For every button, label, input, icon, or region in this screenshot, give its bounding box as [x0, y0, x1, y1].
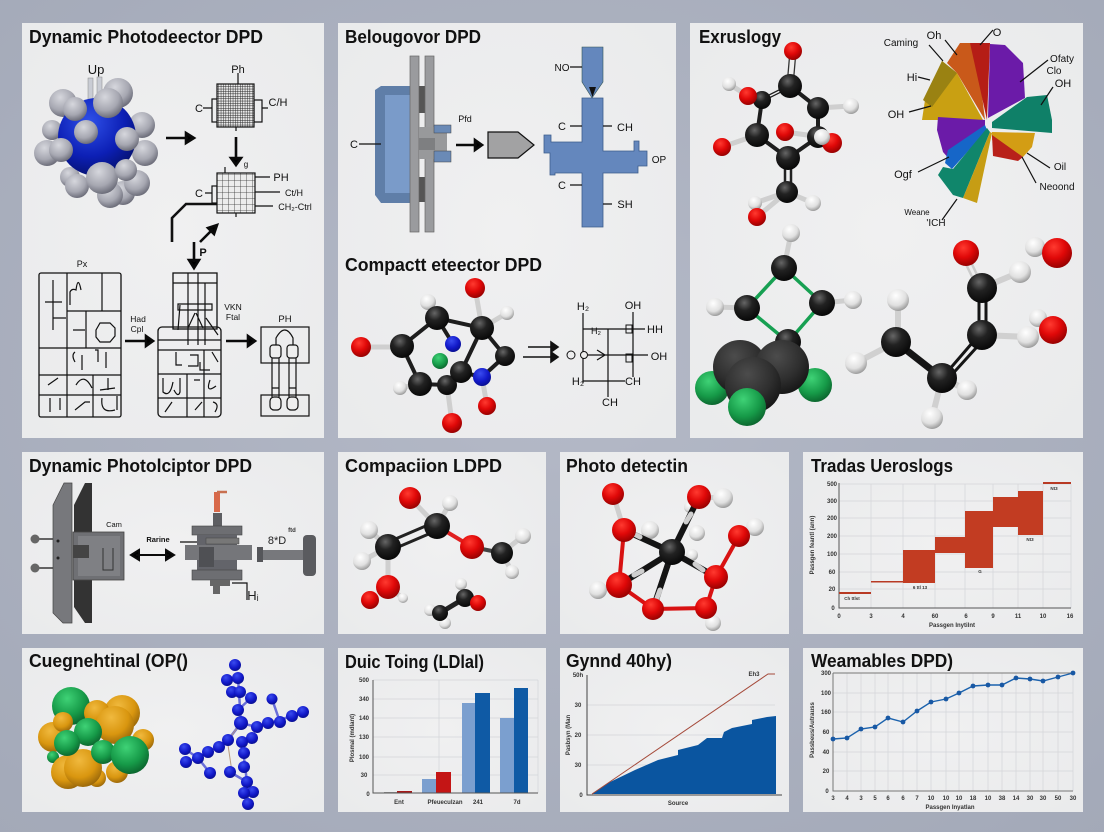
diagram: structural formula: HH: [647, 324, 663, 336]
label: VKN Ftal: [224, 302, 242, 322]
schematic: center device: [158, 273, 221, 417]
chart: blue line: 60: [823, 730, 830, 736]
chart labels: Ofaty: [1050, 54, 1074, 65]
chart: blue line: 300: [821, 671, 832, 677]
heading: Belougovor DPD: [345, 27, 481, 47]
chip: fine grid: [195, 64, 288, 131]
chart: blue line: 160: [821, 710, 832, 716]
chart: stepped area with line: [566, 672, 782, 807]
diagram: blue cross: C: [558, 180, 566, 192]
heading: Compactt eteector DPD: [345, 255, 542, 275]
panel: Compaciion LDPD: [338, 452, 546, 634]
panel: Dynamic Photolciptor DPD: [22, 452, 324, 634]
chart: red floating bars: 6 ttl 13: [913, 585, 928, 590]
diagram: blue cross: NO: [554, 63, 570, 74]
heading: Photo detectin: [566, 456, 688, 476]
molecule: blue network: [179, 659, 309, 810]
panel: Weamables DPD: [803, 648, 1083, 812]
chart: grouped bars: 500: [359, 678, 370, 684]
chart: red floating bars: 0: [837, 614, 841, 620]
chip: coarse grid: PH: [273, 172, 289, 184]
chart: blue line: 50: [1055, 796, 1062, 802]
molecule: red ring: [589, 483, 764, 631]
chart: stepped area with line: 20: [575, 733, 582, 739]
label: Up: Up: [88, 62, 104, 77]
chart: red floating bars: 0: [831, 606, 835, 612]
heading: Compaciion LDPD: [345, 456, 502, 476]
diagram: gray plates and box: [30, 483, 124, 623]
diagram: structural formula: CH: [625, 376, 641, 388]
arrow: grid to device: [125, 336, 153, 346]
chart: blue line: 10: [985, 796, 992, 802]
molecule: green-bonded square: [695, 224, 862, 426]
chart: blue line: 18: [970, 796, 977, 802]
label: VKN Ftal: Ftal: [226, 312, 240, 322]
chart: blue line: 3: [831, 796, 835, 802]
chart: red floating bars: 20: [829, 587, 836, 593]
chart: blue line: 6: [901, 796, 905, 802]
chart labels: Hi: [907, 72, 917, 84]
panel: Dynamic Photodeector DPD: [22, 23, 324, 438]
chart: red floating bars: 300: [827, 499, 838, 505]
diagram: structural formula: H₂: [591, 326, 601, 336]
chart: red floating bars: Nt3: [1026, 537, 1034, 542]
chart: red floating bars: [810, 482, 1074, 629]
molecule: compact: [351, 278, 515, 433]
arrow: double: [523, 342, 558, 362]
labels: assembly: Hᵢ: [247, 588, 259, 603]
heading: Gynnd 40hy): [566, 651, 672, 671]
chart: red floating bars: 200: [827, 534, 838, 540]
chart: blue line: 3: [859, 796, 863, 802]
chart: red floating bars: 6: [964, 614, 968, 620]
chart: grouped bars: 130: [359, 735, 370, 741]
chart: multicolor radial pie: [909, 30, 1053, 220]
chart labels: O: [993, 27, 1002, 39]
chart: grouped bars: 140: [359, 716, 370, 722]
label: P: P: [199, 247, 207, 259]
label: Cam: Cam: [106, 520, 122, 529]
chart: stepped area with line: 30: [575, 703, 582, 709]
panel: Duic Toing: [338, 648, 546, 812]
arrow: diagonal up: [200, 225, 217, 242]
chart labels: Clo: [1046, 66, 1062, 77]
chart: red floating bars: 16: [1067, 614, 1074, 620]
chart: grouped bars: 241: [473, 800, 484, 806]
chart: blue line: 4: [845, 796, 849, 802]
chart: blue line: 30: [1027, 796, 1034, 802]
chart: grouped bars: Pfeueculzan: [427, 800, 463, 806]
chart: red floating bars: G: [978, 569, 982, 574]
chart labels: Caming: [884, 38, 918, 49]
chip: coarse grid: g: [244, 160, 248, 169]
chart: stepped area with line: Pasbsyn (Man: [566, 714, 572, 755]
arrow: elbow connector: [172, 204, 217, 242]
arrow: cluster to chip: [166, 133, 194, 143]
chart labels: Oil: [1054, 162, 1066, 173]
chart: blue line: 30: [1070, 796, 1077, 802]
chart: grouped bars: Plosmal (mdlant): [350, 714, 356, 762]
label: Px: Px: [77, 259, 88, 269]
chart: red floating bars: 10: [1040, 614, 1047, 620]
labels: assembly: 8*D: [268, 535, 286, 547]
label: Rarine: Rarine: [146, 535, 170, 544]
chart: red floating bars: Nt3: [1050, 486, 1058, 491]
molecule: chain with hydroxyl: [845, 237, 1072, 429]
diagram: blue cross: [544, 47, 667, 227]
chart: blue line: Passbeus/Autrauss: [810, 701, 816, 758]
chart labels: OH: [1055, 78, 1071, 90]
label: Pfd: Pfd: [458, 114, 472, 124]
chart: blue line: 10: [928, 796, 935, 802]
chart: stepped area with line: 30: [575, 763, 582, 769]
heading: Weamables DPD): [811, 651, 953, 671]
chart: blue line: 0: [825, 789, 829, 795]
chip: coarse grid: CH₂-Ctrl: [278, 202, 312, 212]
chart: blue line: 38: [999, 796, 1006, 802]
chart: stepped area with line: 50h: [573, 673, 584, 679]
chart: blue line: 10: [956, 796, 963, 802]
label: Had Cpl: Cpl: [131, 324, 143, 334]
diagram: mechanical assembly: [180, 492, 316, 600]
arrow: chip down: [231, 137, 241, 165]
labels: assembly: [247, 528, 296, 603]
chart: blue line: [810, 671, 1077, 811]
chart: red floating bars: Passgen feantl (ann): [810, 516, 816, 574]
heading: Exruslogy: [699, 27, 781, 47]
chart: red floating bars: 200: [827, 516, 838, 522]
labels: assembly: ftd: [288, 528, 296, 534]
chart: red floating bars: 100: [827, 552, 838, 558]
chart labels: Ogf: [894, 169, 913, 181]
chart: blue line: 10: [943, 796, 950, 802]
chart: stepped area with line: Source: [668, 801, 689, 807]
chart: blue line: Passgen Inyatlan: [925, 805, 975, 811]
chip: coarse grid: Ct/H: [285, 188, 303, 198]
chip: coarse grid: C: [195, 188, 203, 200]
diagram: blue cross: SH: [617, 199, 633, 211]
chip: coarse grid: [195, 160, 312, 217]
chart: red floating bars: 60: [829, 570, 836, 576]
schematic: tube device: [261, 327, 309, 416]
chart: red floating bars: 500: [827, 482, 838, 488]
chart: grouped bars: 100: [359, 755, 370, 761]
chart: red floating bars: 9: [991, 614, 995, 620]
molecule: green and gold cluster: [38, 687, 154, 789]
chart: red floating bars: 4: [901, 614, 905, 620]
chart: blue line: 14: [1013, 796, 1020, 802]
chip: fine grid: Ph: [231, 64, 245, 76]
chart: red floating bars: 60: [932, 614, 939, 620]
arrow: to pentagon: [456, 140, 482, 150]
arrow: device to PH: [226, 336, 255, 346]
heading: Duic Toing (LDlal): [345, 652, 484, 672]
label: PH: PH: [278, 314, 292, 325]
diagram: blue cross: OP: [652, 155, 667, 166]
heading: Tradas Ueroslogs: [811, 456, 953, 476]
diagram: structural formula: OH: [651, 351, 667, 363]
molecule: ring top: [713, 42, 859, 226]
chart: blue line: 6: [886, 796, 890, 802]
chart: blue line: 40: [823, 750, 830, 756]
panel: Gynnd 40hy: [560, 648, 789, 812]
panel: Photo detectin: [560, 452, 789, 634]
label: C pointer: C: [350, 139, 358, 151]
chart labels: OH: [888, 109, 904, 121]
chart labels: [884, 27, 1075, 229]
diagram: structural formula: H₂: [577, 301, 589, 313]
chip: fine grid: C/H: [269, 97, 288, 109]
chart: red floating bars: 11: [1015, 614, 1022, 620]
chart labels: 'ICH: [926, 218, 946, 229]
chart: grouped bars: Ent: [394, 800, 404, 806]
chart: blue line: 100: [821, 691, 832, 697]
icon: gray and blue sphere cluster: [34, 77, 158, 208]
chart: blue line: 5: [873, 796, 877, 802]
chart labels: Oh: [927, 30, 941, 42]
heading: Dynamic Photodeector DPD: [29, 27, 263, 47]
chart labels: Weane: [904, 208, 930, 217]
panel: Cuegnehtinal (OP(): [22, 648, 324, 812]
panel: Exruslogy: [690, 23, 1083, 438]
chart: blue line: 30: [1040, 796, 1047, 802]
schematic: left grid: [39, 273, 121, 417]
chip: fine grid: C: [195, 103, 203, 115]
heading: Cuegnehtinal (OP(): [29, 651, 188, 671]
chart: blue line: 7: [915, 796, 919, 802]
chart labels: Neoond: [1039, 182, 1075, 193]
diagram: blue cross: CH: [617, 122, 633, 134]
diagram: blue plate assembly: [375, 56, 451, 232]
chart: blue line: 20: [823, 769, 830, 775]
chart: red floating bars: Ch ttlst: [844, 596, 860, 601]
chart: grouped bars: 7d: [513, 800, 521, 806]
chart: stepped area with line: 0: [579, 793, 583, 799]
arrow: double-headed: [131, 550, 174, 560]
label: VKN Ftal: VKN: [224, 302, 242, 312]
panel: Tradas Ueroslogs: [803, 452, 1083, 634]
panel: Belougovor DPD: [338, 23, 676, 438]
diagram: structural formula: CH: [602, 397, 618, 409]
chart: grouped bars: [350, 678, 538, 806]
chart: grouped bars: 0: [366, 792, 370, 798]
chart: red floating bars: 3: [869, 614, 873, 620]
chart: red floating bars: Passgen Inytilnt: [929, 623, 975, 629]
label: Had Cpl: Had: [130, 314, 146, 324]
chart: grouped bars: 30: [361, 773, 368, 779]
diagram: structural formula: OH: [625, 300, 641, 312]
chart: stepped area with line: Eh3: [748, 672, 760, 678]
diagram: blue cross: C: [558, 121, 566, 133]
label: Had Cpl: [130, 314, 146, 334]
label: C pointer: [350, 139, 381, 151]
arrow: P down: [189, 242, 199, 268]
molecule: compact chain: [353, 487, 531, 629]
heading: Dynamic Photolciptor DPD: [29, 456, 252, 476]
diagram: structural formula: [567, 300, 667, 409]
diagram: structural formula: H₂: [572, 376, 584, 388]
chart: grouped bars: 340: [359, 697, 370, 703]
icon: gray pentagon: [488, 132, 534, 158]
